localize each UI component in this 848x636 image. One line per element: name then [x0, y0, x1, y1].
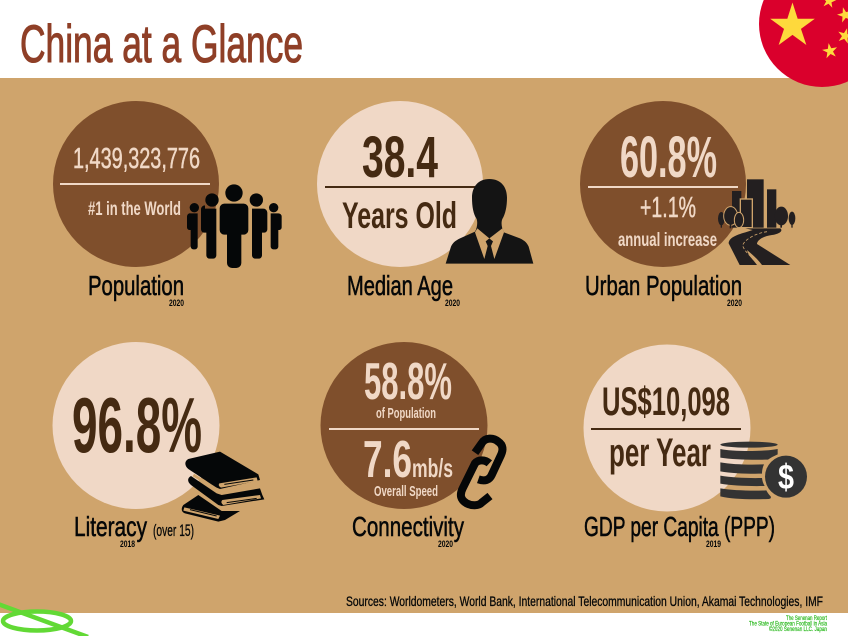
logo swoosh — [0, 604, 88, 636]
population value: 1,439,323,776 — [73, 143, 200, 175]
population rank: #1 in the World — [88, 199, 181, 220]
internet share value: 58.8% — [364, 353, 452, 411]
dollar sign: $ — [778, 458, 794, 497]
panel: connectivity — [320, 342, 503, 549]
urban growth caption: annual increase — [618, 230, 717, 251]
urban population label: Urban Population — [585, 270, 742, 301]
literacy value: 96.8% — [72, 381, 202, 469]
footer credits: The Senenan Report — [786, 616, 827, 622]
icon: businessman — [446, 179, 533, 264]
internet share caption: of Population — [376, 405, 436, 422]
footer credits — [749, 616, 828, 633]
icon: coins with dollar — [720, 442, 807, 499]
median age label: Median Age — [347, 270, 453, 301]
footer credits: ©2020 Senenan LLC. Japan — [769, 626, 827, 633]
panel: population — [53, 101, 282, 308]
icon: chain link — [461, 439, 503, 505]
population year: 2020 — [169, 298, 184, 308]
speed caption: Overall Speed — [374, 483, 438, 500]
panel: literacy — [52, 342, 264, 549]
population label: Population — [88, 270, 184, 301]
median age unit: Years Old — [342, 195, 457, 236]
connectivity label: Connectivity — [352, 511, 464, 542]
panel: urban population — [580, 101, 795, 308]
literacy year: 2018 — [120, 539, 135, 549]
title: China at a Glance — [20, 15, 303, 74]
speed unit: mb/s — [412, 453, 453, 483]
GDP value: US$10,098 — [602, 380, 730, 424]
urban growth value: +1.1% — [640, 192, 696, 224]
median age year: 2020 — [445, 298, 460, 308]
urban share value: 60.8% — [620, 125, 717, 190]
icon: stack of books — [182, 452, 264, 522]
icon: city and road — [718, 179, 795, 265]
panel: GDP per capita — [584, 344, 807, 549]
GDP year: 2019 — [706, 539, 721, 549]
connectivity year: 2020 — [438, 539, 453, 549]
median age value: 38.4 — [362, 125, 438, 190]
icon: China flag circle — [759, 0, 848, 87]
literacy qualifier: (over 15) — [153, 521, 194, 540]
literacy label: Literacy — [74, 511, 147, 542]
icon: group of people — [187, 184, 282, 268]
speed value: 7.6 — [363, 431, 412, 489]
GDP unit: per Year — [609, 431, 711, 475]
urban population year: 2020 — [727, 298, 742, 308]
panel: median age — [317, 101, 533, 308]
